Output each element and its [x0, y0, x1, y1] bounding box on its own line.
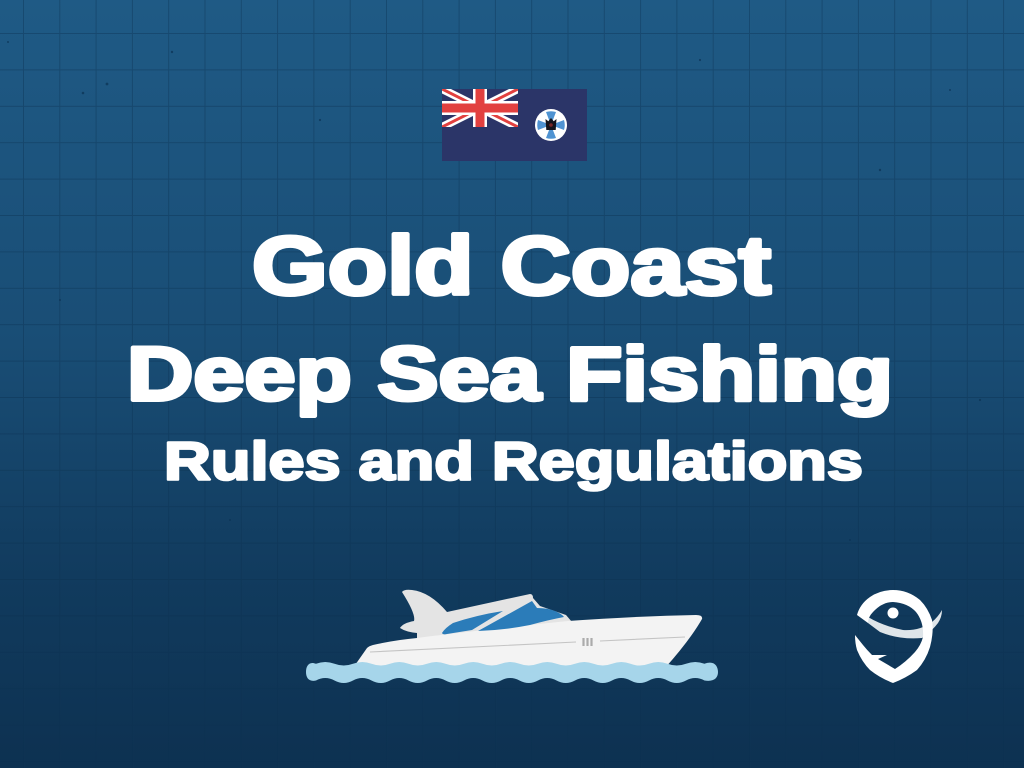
- icon: motor yacht on waves: [306, 590, 718, 683]
- logo eye: [888, 608, 898, 618]
- subtitle: Rules and Regulations: Rules and Regulations: [164, 432, 863, 492]
- title: Gold Coast: Gold Coast: [252, 219, 771, 312]
- icon: fish hook logo: [855, 590, 942, 683]
- hull stripe and vents: [370, 637, 685, 652]
- icon: union jack canton: [442, 89, 518, 127]
- boat windows: [442, 601, 564, 634]
- waves: [306, 662, 718, 683]
- icon: Queensland flag: [442, 89, 587, 161]
- boat cabin: [400, 590, 572, 645]
- logo body: [855, 590, 933, 683]
- icon: state badge: [535, 109, 567, 141]
- boat hull: [353, 615, 702, 668]
- logo band: [868, 610, 942, 638]
- title: Deep Sea Fishing: Deep Sea Fishing: [127, 332, 893, 417]
